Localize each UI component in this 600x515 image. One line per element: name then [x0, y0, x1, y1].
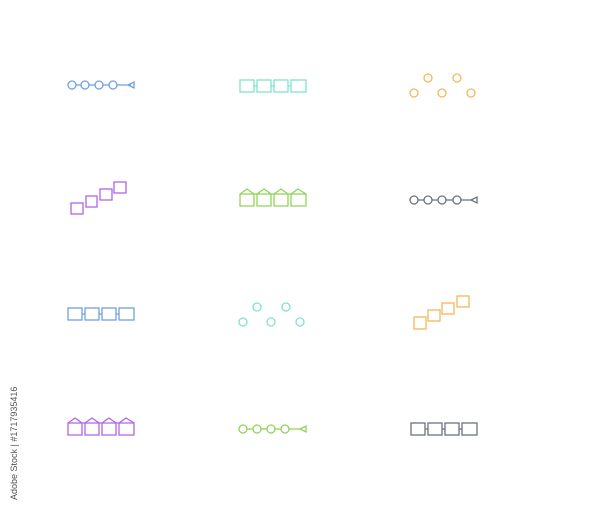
icon: blue circle chain [68, 81, 134, 89]
icon: purple square staircase [71, 182, 126, 214]
icon: blue box chain [68, 308, 134, 320]
icon: teal box chain [240, 80, 306, 92]
icon: orange circle zigzag [410, 74, 475, 97]
watermark id text: Adobe Stock | #1717935416 [9, 387, 19, 500]
icon: gray box chain [411, 423, 477, 435]
icon: orange square staircase [414, 296, 469, 329]
icon: purple house chain [68, 418, 134, 435]
icon: green circle chain [239, 425, 306, 433]
icon: teal circle zigzag [239, 303, 304, 326]
icon: green house chain [240, 189, 306, 206]
icon: gray circle chain [410, 196, 477, 204]
